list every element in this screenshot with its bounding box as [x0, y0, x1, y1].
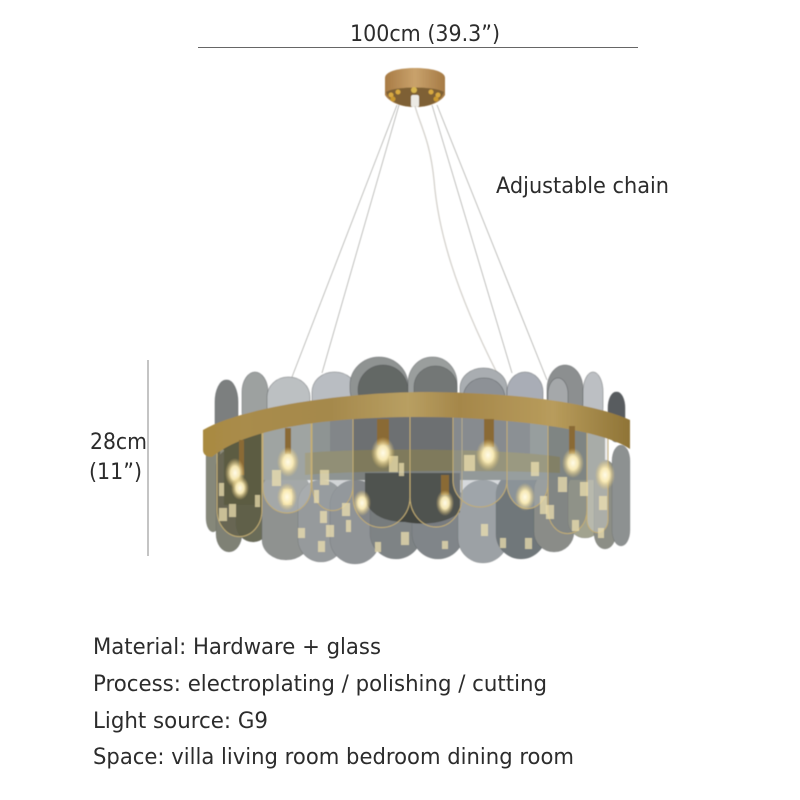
height dimension line [148, 360, 149, 556]
height dimension label [89, 430, 147, 485]
process line: Process: electroplating / polishing / cutting [93, 672, 547, 697]
specification list [93, 635, 574, 770]
bulb holders [239, 419, 575, 495]
height dimension label: 28cm [90, 430, 147, 455]
inner dark core and rear ring [224, 415, 605, 524]
gold ring band [203, 392, 630, 457]
reflected light squares [219, 455, 607, 552]
chandelier illustration [203, 68, 630, 564]
lower scalloped glass panels [206, 440, 630, 564]
width dimension label: 100cm (39.3”) [350, 22, 500, 47]
adjustable chain label: Adjustable chain [496, 174, 669, 199]
height dimension label: (11”) [89, 460, 142, 485]
glowing bulbs [225, 437, 615, 516]
width dimension line [198, 47, 638, 48]
space line: Space: villa living room bedroom dining room [93, 745, 574, 770]
ceiling canopy [385, 68, 445, 107]
suspension wires and power cord [292, 105, 547, 380]
clear arched glass panels with gold edges [217, 410, 608, 537]
upper glass panels [215, 357, 625, 450]
light source line: Light source: G9 [93, 709, 268, 734]
material line: Material: Hardware + glass [93, 635, 381, 660]
